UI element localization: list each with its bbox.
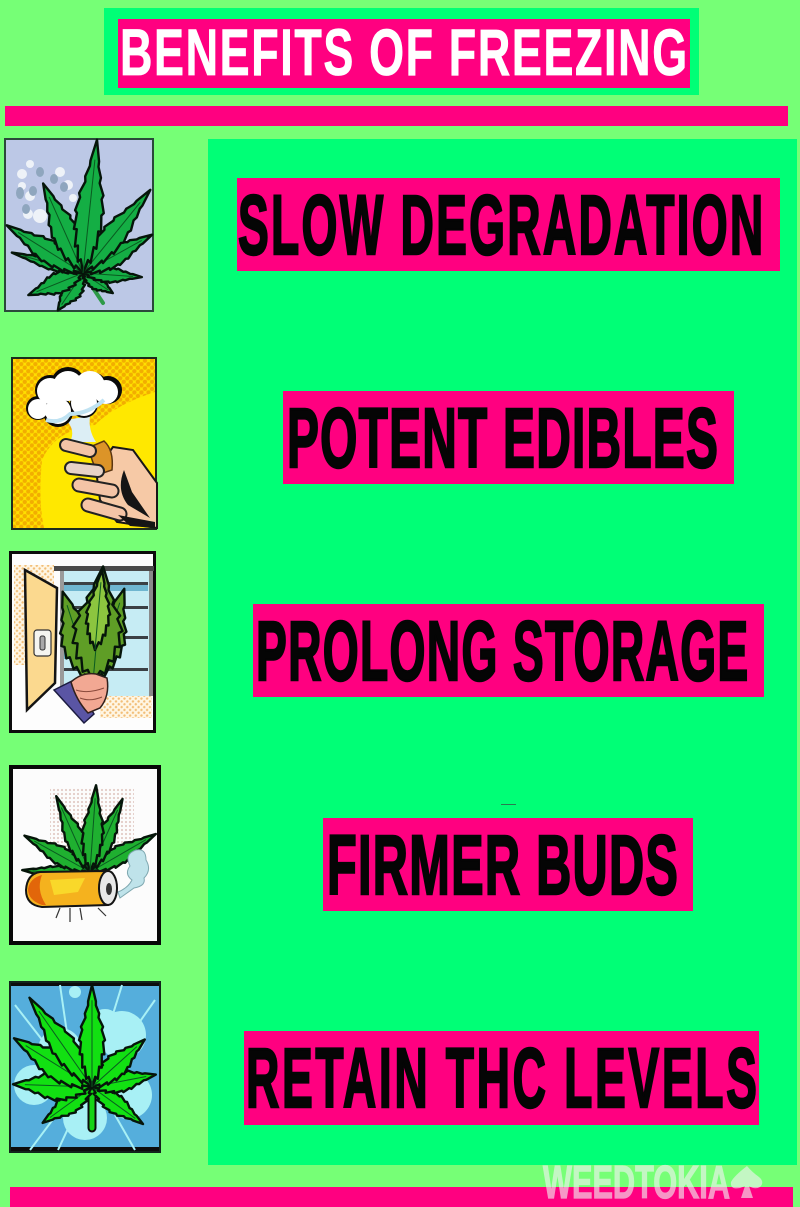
icon: leaf on blue burst (6, 982, 160, 1152)
icon: leaf and smoking joint (11, 767, 161, 943)
icon: leaf with water droplets (0, 138, 160, 316)
bottom bar (10, 1187, 793, 1207)
icon: hand holding smoking nugget (12, 358, 157, 529)
panel: benefits list (208, 139, 797, 1165)
benefit: prolong storage: PROLONG STORAGE (256, 606, 748, 699)
benefit: retain thc levels: RETAIN THC LEVELS (246, 1033, 757, 1126)
benefit: slow degradation: SLOW DEGRADATION (238, 180, 763, 273)
title banner: BENEFITS OF FREEZING (120, 15, 687, 89)
fingers (66, 445, 120, 514)
cloud (26, 367, 122, 427)
benefit: potent edibles: POTENT EDIBLES (287, 392, 718, 485)
icon: hand holding bud at freezer (10, 552, 154, 732)
top divider bar (5, 106, 788, 126)
benefit: firmer buds: FIRMER BUDS (327, 818, 678, 912)
icon: spade (731, 1166, 762, 1198)
cannabis bud (46, 564, 141, 688)
